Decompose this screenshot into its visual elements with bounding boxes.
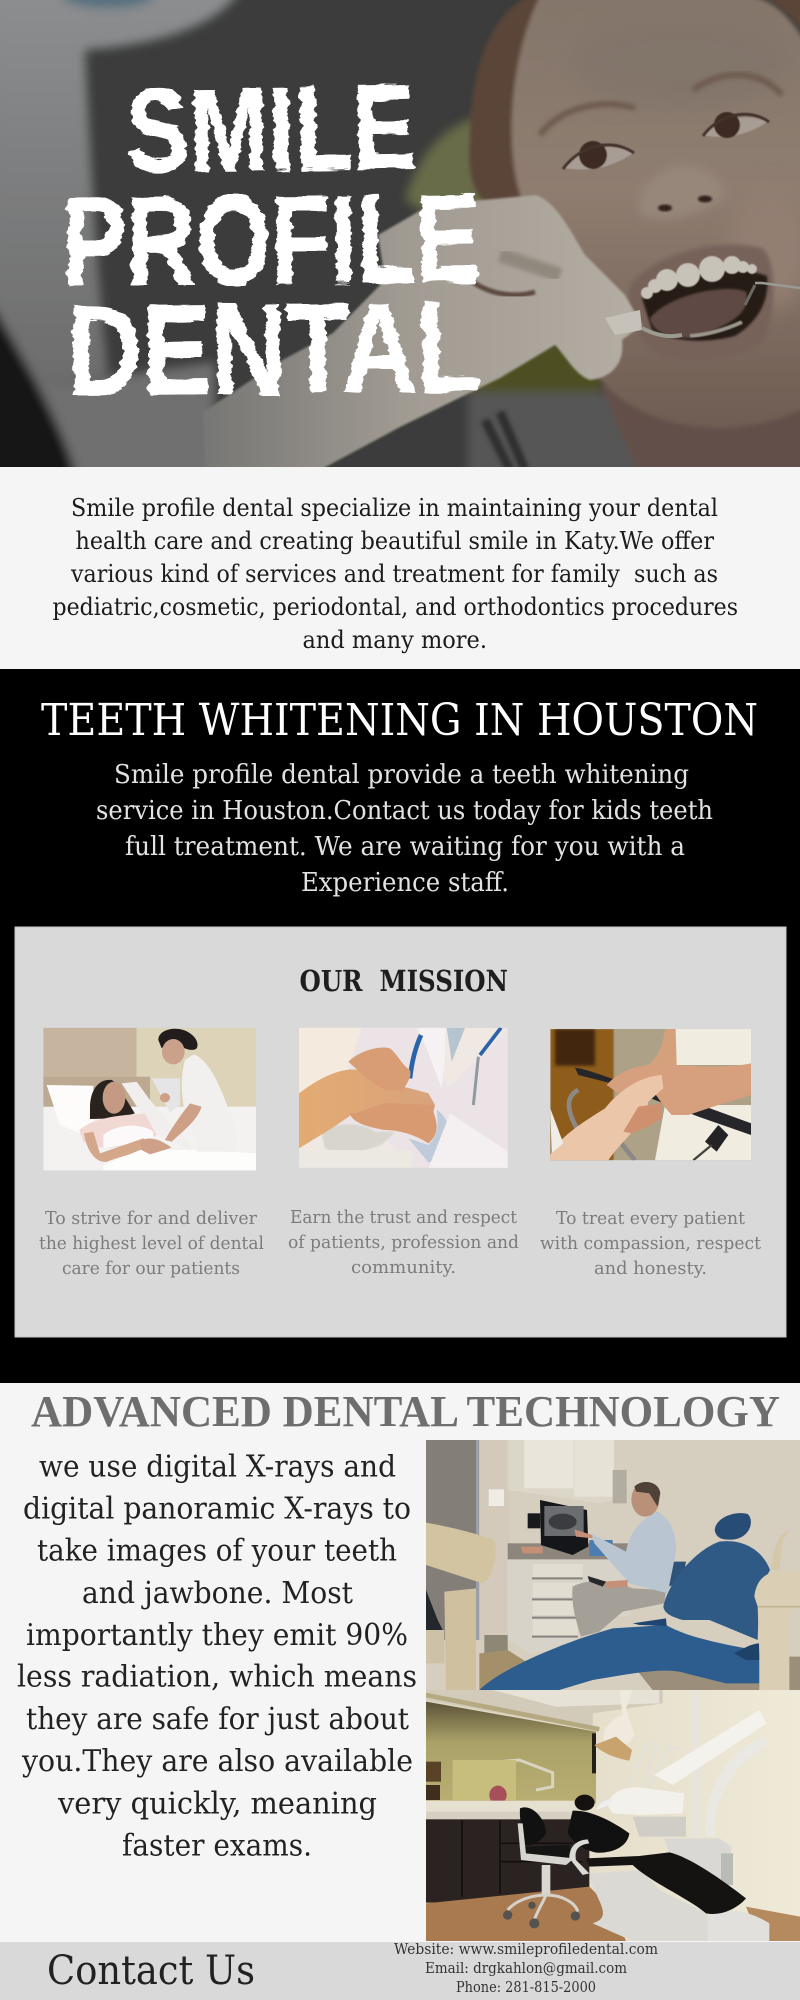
contact us heading: Contact Us (47, 1948, 255, 1994)
technology paragraph: we use digital X-rays and (39, 1450, 396, 1485)
teeth whitening paragraph: Experience staff. (301, 867, 509, 898)
eyes, brows and nose (540, 75, 782, 219)
page sections background (0, 467, 800, 2000)
mission caption 1: care for our patients (62, 1258, 240, 1279)
mission caption 1: the highest level of dental (39, 1233, 264, 1254)
mission caption 3: with compassion, respect (540, 1233, 762, 1254)
mission caption 3: and honesty. (594, 1258, 707, 1279)
contact details: Email: drgkahlon@gmail.com (425, 1959, 627, 1977)
mission caption 1: To strive for and deliver (45, 1208, 257, 1229)
gloved hand (203, 195, 682, 470)
photo: dentist reviewing x-ray (426, 1440, 800, 1690)
mission caption 2: Earn the trust and respect (290, 1207, 518, 1228)
intro paragraph (52, 493, 738, 654)
teeth whitening paragraph (96, 759, 713, 898)
mission caption 2 (288, 1207, 519, 1278)
intro paragraph: pediatric,cosmetic, periodontal, and orthodontics procedures (52, 592, 738, 621)
contact details: Phone: 281-815-2000 (456, 1978, 596, 1996)
teeth whitening paragraph: full treatment. We are waiting for you with a (125, 831, 685, 862)
mission caption 2: of patients, profession and (288, 1232, 519, 1253)
intro paragraph: health care and creating beautiful smile in Katy.We offer (76, 526, 714, 555)
panel: our mission (15, 927, 786, 1337)
photo: doctor holding patient hand (299, 1028, 508, 1168)
mission caption 1 (39, 1208, 264, 1279)
technology paragraph: and jawbone. Most (82, 1576, 353, 1611)
technology paragraph: take images of your teeth (37, 1534, 397, 1569)
intro paragraph: various kind of services and treatment for family such as (70, 559, 718, 588)
technology paragraph: faster exams. (122, 1828, 312, 1863)
heading: advanced dental technology: ADVANCED DENTAL TECHNOLOGY (31, 1387, 780, 1436)
teeth whitening paragraph: service in Houston.Contact us today for kids teeth (96, 795, 713, 826)
contact details (394, 1940, 658, 1996)
mission caption 3: To treat every patient (556, 1208, 746, 1229)
mission caption 2: community. (351, 1257, 456, 1278)
technology paragraph: you.They are also available (21, 1744, 413, 1779)
mouth with teeth and dental mirror (629, 245, 800, 361)
technology paragraph: less radiation, which means (17, 1660, 417, 1695)
title: Smile Profile Dental (61, 59, 481, 423)
mission caption 3 (540, 1208, 762, 1279)
title: Smile Profile Dental: PROFILE (61, 167, 481, 314)
teeth whitening paragraph: Smile profile dental provide a teeth whitening (114, 759, 689, 790)
technology paragraph (17, 1450, 417, 1863)
technology paragraph: digital panoramic X-rays to (23, 1492, 411, 1526)
photo: dental operatory (426, 1690, 800, 1941)
hero photo: child at dentist (0, 0, 800, 467)
intro paragraph: and many more. (302, 625, 487, 654)
contact details: Website: www.smileprofiledental.com (394, 1940, 658, 1958)
technology paragraph: very quickly, meaning (57, 1786, 377, 1821)
mission heading: OUR MISSION (300, 964, 508, 998)
title: Smile Profile Dental: DENTAL (66, 276, 481, 423)
photo: nurse with patient (43, 1028, 256, 1170)
technology paragraph: importantly they emit 90% (26, 1618, 408, 1653)
intro paragraph: Smile profile dental specialize in maintaining your dental (71, 493, 718, 522)
title: Smile Profile Dental: SMILE (125, 59, 417, 199)
photo: hands holding walker (550, 1029, 751, 1160)
technology paragraph: they are safe for just about (26, 1702, 409, 1737)
